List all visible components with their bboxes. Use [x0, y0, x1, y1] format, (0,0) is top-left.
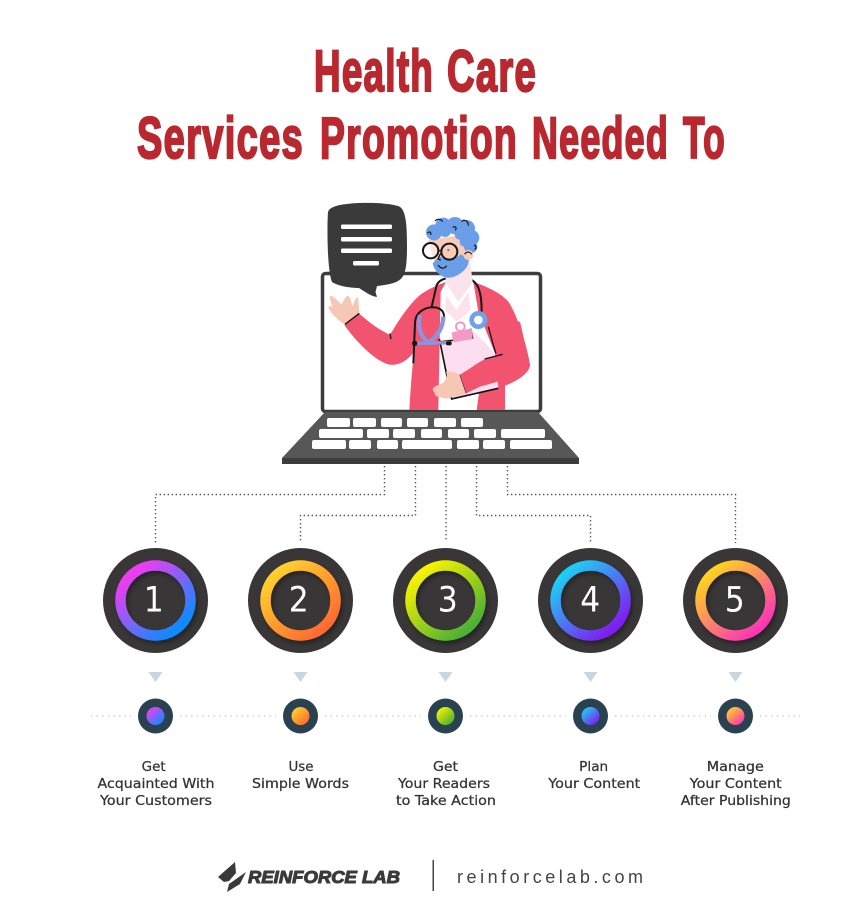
step 1 label: Your Customers	[99, 794, 212, 809]
step 4 badge: 4	[580, 580, 600, 620]
step 3 label: to Take Action	[396, 794, 496, 809]
hair	[426, 217, 479, 253]
title	[137, 39, 726, 171]
lower hand	[433, 372, 466, 398]
step 5 dot	[718, 698, 753, 734]
step 3 arrow	[438, 672, 452, 682]
step 1 label	[98, 760, 214, 809]
step 2 badge: 2	[289, 580, 309, 620]
doctor figure	[328, 217, 530, 410]
divider	[432, 860, 434, 891]
step 4 arrow	[584, 672, 598, 682]
step 2 badge	[248, 548, 353, 653]
speech bubble	[327, 203, 407, 297]
step 5 arrow	[728, 672, 742, 682]
icon: brand logo	[218, 862, 246, 892]
shirt	[438, 281, 495, 410]
step 5 badge: 5	[725, 580, 745, 620]
step 1 arrow	[148, 672, 162, 682]
step 5 label: Manage	[707, 760, 764, 775]
stethoscope	[413, 307, 444, 363]
step 3 label: Get	[433, 760, 458, 775]
raised hand	[328, 296, 359, 324]
coat right sleeve	[459, 322, 530, 393]
step 4 label: Your Content	[547, 777, 640, 792]
step 4 label	[547, 760, 640, 792]
laptop screen	[322, 274, 540, 412]
step 1 dot	[138, 698, 173, 734]
brand name: REINFORCE LAB	[248, 867, 400, 887]
title: Care	[447, 39, 537, 104]
beard	[433, 254, 469, 278]
title: Health	[314, 39, 434, 104]
dotted timeline	[91, 715, 800, 717]
step 3 badge	[393, 548, 498, 653]
step 2 label	[252, 760, 349, 792]
laptop keyboard base	[282, 412, 579, 464]
glasses	[423, 243, 438, 258]
coat	[344, 282, 530, 410]
step 3 badge: 3	[438, 580, 458, 620]
dotted connectors from laptop to steps	[156, 466, 736, 543]
step 2 label: Simple Words	[252, 777, 349, 792]
step 4 badge	[538, 548, 643, 653]
step 5 label	[681, 760, 791, 809]
clipboard	[440, 330, 498, 398]
step 1 badge	[103, 548, 208, 653]
step 3 dot	[428, 698, 463, 734]
step 1 label: Get	[142, 760, 166, 775]
title: To	[683, 106, 726, 171]
step 5 label: After Publishing	[681, 794, 791, 809]
step 1 badge: 1	[144, 580, 164, 620]
step 2 label: Use	[288, 760, 314, 775]
step 2 dot	[283, 698, 318, 734]
website: reinforcelab.com	[457, 867, 643, 887]
step 4 label: Plan	[579, 760, 608, 775]
title: Needed	[532, 106, 669, 171]
title: Services	[137, 106, 304, 171]
step 3 label	[396, 760, 496, 809]
step 3 label: Your Readers	[397, 777, 490, 792]
step 1 label: Acquainted With	[98, 777, 214, 792]
footer brand	[218, 860, 643, 892]
step 2 arrow	[294, 672, 308, 682]
step 5 badge	[683, 548, 788, 653]
title: Promotion	[320, 106, 518, 171]
step 5 label: Your Content	[689, 777, 782, 792]
step 4 dot	[573, 698, 608, 734]
illustration: doctor on laptop	[282, 203, 579, 464]
neck and face	[446, 260, 473, 302]
